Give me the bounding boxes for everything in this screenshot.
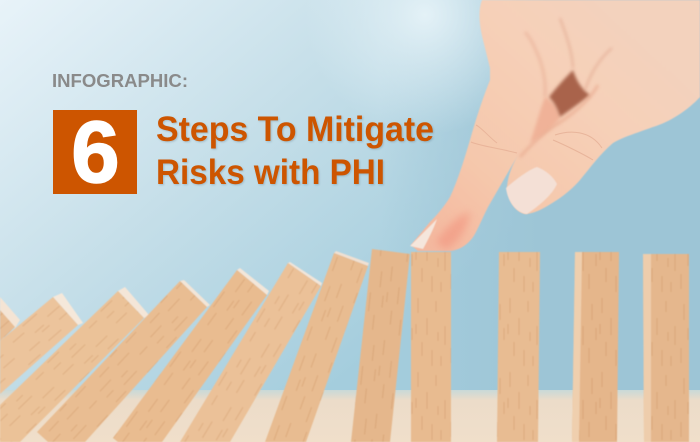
domino 7 bbox=[265, 251, 369, 442]
falling domino blocks bbox=[0, 249, 410, 442]
index knuckle creases bbox=[471, 125, 517, 153]
domino 8 bbox=[351, 249, 410, 442]
pink fingertip shading bbox=[436, 212, 470, 249]
index nail bbox=[410, 219, 437, 249]
thumb joint creases bbox=[553, 132, 602, 160]
number badge: 6 bbox=[71, 104, 120, 201]
eyebrow label: INFOGRAPHIC: bbox=[52, 71, 188, 91]
domino 12 bbox=[643, 254, 689, 442]
domino 9 (under fingertip) bbox=[411, 252, 451, 442]
title: Risks with PHI bbox=[156, 153, 385, 192]
index finger side shading bbox=[525, 32, 545, 97]
tucked finger behind thumb bbox=[530, 97, 560, 143]
thumb upper edge shading bbox=[520, 85, 598, 157]
dark gap between fingers bbox=[549, 70, 590, 117]
title bbox=[156, 110, 434, 192]
title: Steps To Mitigate bbox=[156, 110, 434, 149]
domino 4 bbox=[37, 280, 210, 442]
domino 3 bbox=[0, 287, 149, 442]
standing domino blocks bbox=[411, 252, 689, 442]
domino 1 (far left) bbox=[0, 297, 20, 341]
domino 10 bbox=[497, 252, 540, 442]
hand silhouette with index finger and thumb bbox=[411, 0, 700, 251]
domino 6 bbox=[180, 262, 322, 442]
wooden table surface bbox=[0, 390, 700, 442]
hand pressing the domino bbox=[410, 0, 700, 251]
thumb nail bbox=[506, 167, 557, 214]
knuckle fold between index and middle finger bbox=[560, 18, 612, 90]
domino 11 bbox=[572, 252, 619, 442]
domino 2 bbox=[0, 293, 83, 394]
domino 5 bbox=[113, 268, 269, 442]
number badge bbox=[53, 104, 137, 201]
